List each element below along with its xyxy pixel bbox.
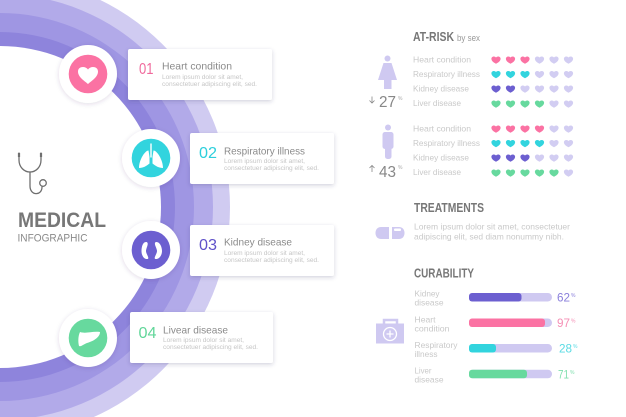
card: kidney disease: 03 [199,237,217,254]
stat: male 43 percent [370,164,403,181]
card: liver disease: consectetuer adipiscing elit, sed. [163,344,258,351]
icon: medical case [376,320,404,344]
list: female risk labels: Liver disease [413,98,461,108]
icon: stethoscope [19,153,46,194]
card: kidney disease: Lorem ipsum dolor sit amet, [224,250,305,257]
row: respiratory illness curability: % [573,344,578,350]
row: liver disease curability: Liver [414,366,432,376]
card: respiratory illness: 02 [199,145,217,162]
panel: concentric purple arc background [0,0,230,417]
card: liver disease: Lorem ipsum dolor sit amet, [163,337,244,344]
heading: at-risk by sex: by sex [457,33,480,43]
panel: step 4 liver disease [59,309,273,367]
list: female risk labels [413,54,480,108]
text: treatments description [414,222,570,242]
panel: step 1 heart condition [59,45,272,103]
panel: step 2 respiratory illness [122,129,334,187]
card: heart condition: Heart condition [162,60,232,72]
row: heart condition curability: 97 [557,318,570,330]
row: respiratory illness curability: illness [414,349,438,359]
stat: female 27 percent [370,94,403,111]
row: respiratory illness curability [414,340,578,359]
row: kidney disease curability [414,288,576,308]
row: respiratory illness curability: 28 [559,344,572,356]
card: kidney disease [190,225,334,276]
card: heart condition: Lorem ipsum dolor sit amet, [162,74,243,81]
list: female risk labels: Respiratory illness [413,69,480,79]
card: respiratory illness: Respiratory illness [224,146,305,158]
card: respiratory illness [190,133,334,184]
card: kidney disease: consectetuer adipiscing elit, sed. [224,257,319,264]
row: heart condition curability [414,314,576,334]
card: heart condition [128,49,272,100]
title: MEDICAL INFOGRAPHIC: MEDICAL [18,209,106,232]
panel: step 3 kidney disease [122,221,334,279]
list: female risk labels: Kidney disease [413,84,469,94]
card: liver disease: Livear disease [163,324,228,336]
row: kidney disease curability: Kidney [414,288,440,298]
heading: curability: CURABILITY [414,266,475,280]
heading: treatments: TREATMENTS [414,201,484,215]
list: female risk labels: Heart condition [413,54,471,64]
card: heart condition: consectetuer adipiscing elit, sed. [162,81,257,88]
icon: liver badge [59,309,117,367]
icon: kidneys badge [122,221,180,279]
row: heart condition curability: condition [414,324,450,334]
card: liver disease: 04 [138,325,157,342]
title: MEDICAL INFOGRAPHIC: INFOGRAPHIC [18,232,88,244]
icon: male figure [382,124,394,159]
row: liver disease curability: disease [414,374,444,384]
icon: lungs badge [122,129,180,187]
heading: at-risk by sex: AT-RISK [413,30,454,44]
stat: male 43 percent: % [398,165,403,171]
card: heart condition: 01 [139,61,154,78]
card: respiratory illness: consectetuer adipiscing elit, sed. [224,165,319,172]
text: treatments description: Lorem ipsum dolor sit amet, consectetuer [414,222,570,232]
text: treatments description: adipiscing elit, sed diam nonummy nibh. [414,232,564,242]
stat: female 27 percent: % [398,96,403,102]
row: liver disease curability: % [570,370,575,376]
list: male risk labels: Liver disease [413,167,461,177]
chart: female heart ratings [491,56,573,108]
row: respiratory illness curability: Respiratory [414,340,458,350]
row: kidney disease curability: 62 [557,292,570,304]
row: liver disease curability [414,366,575,384]
chart: male heart ratings [491,125,573,177]
row: heart condition curability: Heart [414,314,436,324]
icon: female figure [378,56,397,89]
list: male risk labels: Heart condition [413,124,471,134]
stat: female 27 percent: 27 [379,94,396,111]
stat: male 43 percent: 43 [379,164,396,181]
icon: pill [376,227,404,239]
row: kidney disease curability: % [571,293,576,299]
card: kidney disease: Kidney disease [224,236,292,248]
list: male risk labels: Kidney disease [413,152,469,162]
row: kidney disease curability: disease [414,298,444,308]
icon: heart badge [59,45,117,103]
list: male risk labels [413,124,480,177]
row: heart condition curability: % [571,318,576,324]
card: liver disease [130,312,273,363]
row: liver disease curability: 71 [558,369,569,381]
card: respiratory illness: Lorem ipsum dolor sit amet, [224,158,305,165]
list: male risk labels: Respiratory illness [413,138,480,148]
title: MEDICAL INFOGRAPHIC [18,209,106,244]
